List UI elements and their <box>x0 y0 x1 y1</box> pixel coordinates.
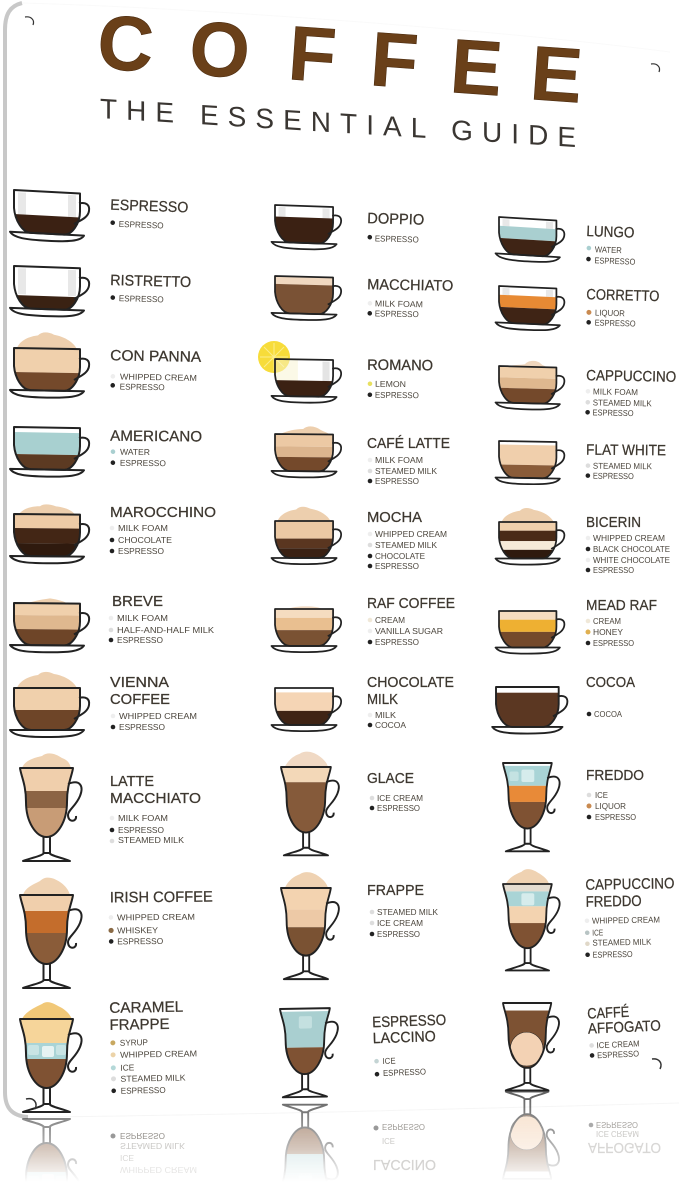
label: chocolate milk: MILK <box>367 691 398 708</box>
label: cappuccino: MILK FOAM <box>593 386 638 397</box>
label: freddo: ESPRESSO <box>595 812 636 822</box>
drink: doppio <box>271 205 424 250</box>
title: COFFEE: COFFEE <box>95 0 585 120</box>
label: lungo: LUNGO <box>586 223 635 242</box>
icon: cappuccino freddo glass <box>503 869 560 970</box>
label: mocha: ESPRESSO <box>375 561 419 571</box>
label: cappuccino: STEAMED MILK <box>593 397 652 408</box>
label: doppio <box>367 210 424 245</box>
label: raf coffee: VANILLA SUGAR <box>375 626 443 636</box>
icon: vienna coffee cup <box>10 672 89 737</box>
label: cappuccino freddo: WHIPPED CREAM <box>592 914 660 926</box>
label: mead raf <box>586 597 657 648</box>
label: mead raf: ESPRESSO <box>593 638 634 648</box>
drink: cappuccino <box>496 360 676 419</box>
drink: americano <box>10 427 202 477</box>
label: mocha: WHIPPED CREAM <box>375 529 447 539</box>
label: americano: ESPRESSO <box>120 458 166 468</box>
label: caramel frappe: WHIPPED CREAM <box>120 1048 197 1060</box>
label: mead raf: HONEY <box>593 627 623 637</box>
icon: caramel frappe glass <box>20 1002 82 1112</box>
label: flat white: STEAMED MILK <box>593 461 652 471</box>
drink: mocha <box>271 507 447 571</box>
label: romano: LEMON <box>375 379 406 389</box>
label: cocoa <box>586 674 635 719</box>
label: caramel frappe: SYRUP <box>120 1037 148 1048</box>
drink: flat white <box>496 441 666 485</box>
reflection: glasses <box>20 1092 559 1191</box>
icon: espresso cup <box>10 190 89 243</box>
label: glace: ESPRESSO <box>377 803 420 813</box>
icon: mocha cup <box>271 507 341 564</box>
label: caffe affogato: ICE CREAM <box>596 1038 640 1050</box>
icon: cafe latte cup <box>271 426 341 478</box>
icon: espresso laccino glass <box>280 1008 338 1097</box>
icon: lungo cup <box>496 217 564 264</box>
icon: marocchino cup <box>10 504 89 564</box>
drink: macchiato <box>271 276 453 321</box>
icon: chocolate milk cup <box>271 688 341 731</box>
icon: glace glass <box>281 752 339 855</box>
label: marocchino: CHOCOLATE <box>118 535 172 545</box>
drink: cafe latte <box>271 426 450 486</box>
label: breve: BREVE <box>112 593 163 610</box>
label: espresso laccino: ESPRESSO <box>372 1012 446 1031</box>
reflection: mirrored labels <box>110 1120 661 1175</box>
label: marocchino <box>110 504 216 556</box>
icon: con panna cup <box>10 332 89 398</box>
icon: irish coffee glass <box>20 878 82 988</box>
icon: latte macchiato glass <box>20 753 82 861</box>
label: espresso <box>110 197 189 231</box>
label: cafe latte: CAFÉ LATTE <box>367 435 450 452</box>
drink: caramel frappe <box>20 998 198 1112</box>
label: caramel frappe: ESPRESSO <box>121 1085 166 1096</box>
label: ristretto: ESPRESSO <box>119 293 164 304</box>
label: marocchino: MILK FOAM <box>118 523 168 533</box>
label: irish coffee: WHIPPED CREAM <box>117 912 195 922</box>
label: macchiato: MACCHIATO <box>367 276 453 295</box>
subtitle: The Essential Guide: THE ESSENTIAL GUIDE <box>100 93 576 153</box>
icon: doppio cup <box>271 205 341 250</box>
drink: cocoa <box>492 674 635 734</box>
label: espresso: ESPRESSO <box>118 219 164 230</box>
label: bicerin: WHITE CHOCOLATE <box>593 555 670 565</box>
label: cappuccino freddo: ESPRESSO <box>593 949 633 960</box>
label: caramel frappe: FRAPPE <box>109 1016 170 1034</box>
reflection: mirrored labels: LACCINO <box>373 1156 436 1173</box>
label: corretto: CORRETTO <box>586 286 660 305</box>
label: mocha: STEAMED MILK <box>375 540 437 550</box>
label: raf coffee <box>367 595 455 647</box>
label: espresso laccino: ICE <box>382 1056 396 1066</box>
drink: romano <box>258 341 433 403</box>
label: bicerin: BLACK CHOCOLATE <box>593 544 670 554</box>
reflection: mirrored labels: ICE CREAM <box>596 1129 639 1139</box>
reflection: mirrored labels: ICE <box>120 1153 134 1163</box>
icon: americano cup <box>10 427 89 477</box>
label: chocolate milk: CHOCOLATE <box>367 674 454 691</box>
label: con panna <box>110 347 201 393</box>
label: cappuccino <box>585 367 676 419</box>
drink: ristretto <box>10 266 191 318</box>
label: cappuccino freddo: FREDDO <box>586 893 642 911</box>
label: cocoa: COCOA <box>586 674 635 691</box>
label: freddo <box>586 767 644 822</box>
label: frappe: FRAPPE <box>367 882 424 899</box>
label: bicerin: ESPRESSO <box>593 565 634 575</box>
label: flat white <box>586 442 666 481</box>
icon: ristretto cup <box>10 266 89 318</box>
label: cafe latte <box>367 435 450 486</box>
label: breve: ESPRESSO <box>117 635 163 645</box>
reflection: mirrored labels: ESPRESSO <box>382 1122 425 1132</box>
drink: corretto <box>496 286 660 331</box>
label: mead raf: MEAD RAF <box>586 597 657 614</box>
label: vienna coffee: VIENNA <box>110 674 169 691</box>
label: flat white: ESPRESSO <box>593 471 634 481</box>
icon: flat white cup <box>496 441 564 485</box>
icon: frappe glass <box>281 872 339 979</box>
label: mead raf: CREAM <box>593 616 621 626</box>
label: lungo: ESPRESSO <box>594 255 636 267</box>
label: espresso laccino <box>372 1012 448 1078</box>
label: cocoa: COCOA <box>594 709 622 719</box>
label: latte macchiato <box>110 773 201 845</box>
label: corretto: ESPRESSO <box>595 317 636 329</box>
icon: corretto cup <box>496 286 564 331</box>
drink: bicerin <box>496 508 670 575</box>
label: caffe affogato <box>587 1002 662 1061</box>
label: caffe affogato: AFFOGATO <box>588 1017 661 1038</box>
label: espresso laccino: ESPRESSO <box>383 1066 426 1078</box>
label: marocchino: ESPRESSO <box>118 546 164 556</box>
icon: breve cup <box>10 598 89 653</box>
label: frappe: ICE CREAM <box>377 918 423 928</box>
label: cafe latte: STEAMED MILK <box>375 466 437 476</box>
label: americano: WATER <box>120 447 150 457</box>
label: cafe latte: ESPRESSO <box>375 476 419 486</box>
label: glace <box>367 770 423 813</box>
reflection: mirrored labels: ESPRESSO <box>596 1120 638 1130</box>
label: freddo: LIQUOR <box>595 801 626 811</box>
drink: latte macchiato <box>20 753 201 861</box>
label: romano <box>367 357 433 400</box>
label: glace: ICE CREAM <box>377 793 423 803</box>
label: freddo: ICE <box>595 790 608 800</box>
label: mocha: CHOCOLATE <box>375 551 425 561</box>
label: frappe: STEAMED MILK <box>377 907 438 917</box>
label: ristretto <box>110 272 191 305</box>
label: cappuccino: ESPRESSO <box>593 407 634 418</box>
label: latte macchiato: MILK FOAM <box>118 813 168 823</box>
label: vienna coffee: ESPRESSO <box>119 722 165 732</box>
icon: bicerin cup <box>496 508 564 565</box>
label: vienna coffee: WHIPPED CREAM <box>119 711 197 721</box>
icon: caffe affogato glass <box>503 1003 559 1090</box>
drink: freddo <box>503 763 644 851</box>
label: chocolate milk <box>367 674 454 730</box>
reflection: mirrored labels: ICE <box>382 1136 395 1146</box>
label: macchiato <box>367 276 453 320</box>
icon: cocoa cup <box>492 687 567 734</box>
reflection: mirrored labels: AFFOGATO <box>588 1139 661 1156</box>
label: breve <box>109 593 214 645</box>
label: corretto: LIQUOR <box>595 307 625 318</box>
reflection: mirrored labels: ESPRESSO <box>120 1131 165 1141</box>
label: irish coffee <box>108 889 213 946</box>
label: cappuccino freddo: ICE <box>592 927 604 938</box>
drink: glace <box>281 752 423 855</box>
label: glace: GLACE <box>367 770 414 787</box>
label: frappe: ESPRESSO <box>377 929 420 939</box>
icon: cappuccino cup <box>496 360 564 410</box>
label: latte macchiato: LATTE <box>110 773 154 790</box>
icon: mead raf cup <box>496 611 564 654</box>
drink: breve <box>10 593 214 653</box>
label: caramel frappe: ICE <box>120 1062 135 1073</box>
label: doppio: ESPRESSO <box>375 233 419 245</box>
label: romano: ESPRESSO <box>375 390 419 400</box>
label: marocchino: MAROCCHINO <box>110 504 216 521</box>
label: irish coffee: IRISH COFFEE <box>110 889 213 906</box>
label: latte macchiato: ESPRESSO <box>118 825 164 835</box>
drink: caffe affogato <box>503 1002 662 1090</box>
label: macchiato: MILK FOAM <box>375 298 423 309</box>
label: cafe latte: MILK FOAM <box>375 455 423 465</box>
label: con panna: CON PANNA <box>110 347 201 366</box>
drink: frappe <box>281 872 438 979</box>
label: freddo: FREDDO <box>586 767 644 784</box>
label: mocha <box>367 509 447 571</box>
icon: macchiato cup <box>271 276 341 321</box>
icon: romano cup <box>271 359 341 403</box>
label: raf coffee: RAF COFFEE <box>367 595 455 612</box>
label: vienna coffee: COFFEE <box>110 691 170 708</box>
label: vienna coffee <box>110 674 197 732</box>
drink: espresso laccino <box>280 1008 448 1097</box>
label: bicerin: WHIPPED CREAM <box>593 533 665 543</box>
drink: lungo <box>496 217 637 267</box>
reflection: mirrored labels: STEAMED MILK <box>120 1141 185 1151</box>
label: cappuccino freddo: STEAMED MILK <box>592 937 652 948</box>
label: ristretto: RISTRETTO <box>110 272 191 291</box>
drink: chocolate milk <box>271 674 454 731</box>
drink: mead raf <box>496 597 657 654</box>
label: caffe affogato: CAFFÉ <box>587 1004 630 1023</box>
icon: lemon slice <box>258 341 290 373</box>
drink: con panna <box>10 332 201 398</box>
label: americano <box>110 428 202 468</box>
label: flat white: FLAT WHITE <box>586 442 666 459</box>
icon: raf coffee cup <box>271 606 341 652</box>
label: corretto <box>586 286 660 329</box>
label: mocha: MOCHA <box>367 509 422 526</box>
label: espresso laccino: LACCINO <box>372 1028 436 1047</box>
label: breve: HALF-AND-HALF MILK <box>117 625 214 635</box>
label: latte macchiato: MACCHIATO <box>110 790 201 807</box>
label: lungo: WATER <box>595 244 622 255</box>
label: americano: AMERICANO <box>110 428 202 445</box>
label: con panna: WHIPPED CREAM <box>120 371 197 383</box>
label: raf coffee: CREAM <box>375 615 405 625</box>
label: bicerin: BICERIN <box>586 514 641 531</box>
drink: irish coffee <box>20 878 213 988</box>
label: espresso: ESPRESSO <box>110 197 189 216</box>
drink: cappuccino freddo <box>503 869 676 970</box>
label: frappe <box>367 882 438 939</box>
label: breve: MILK FOAM <box>117 613 168 623</box>
drink: raf coffee <box>271 595 455 652</box>
label: caramel frappe: STEAMED MILK <box>120 1073 186 1084</box>
label: romano: ROMANO <box>367 357 433 374</box>
label: macchiato: ESPRESSO <box>375 308 419 319</box>
label: latte macchiato: STEAMED MILK <box>118 835 184 845</box>
label: bicerin <box>586 514 670 575</box>
icon: freddo glass <box>503 763 560 851</box>
label: lungo <box>585 223 637 267</box>
label: chocolate milk: COCOA <box>375 720 406 730</box>
label: con panna: ESPRESSO <box>120 381 165 392</box>
label: irish coffee: WHISKEY <box>117 925 158 935</box>
label: raf coffee: ESPRESSO <box>375 637 419 647</box>
label: caramel frappe <box>109 998 198 1096</box>
reflection: mirrored labels: WHIPPED CREAM <box>120 1165 197 1175</box>
label: irish coffee: ESPRESSO <box>117 936 164 946</box>
drink: marocchino <box>10 504 216 564</box>
drink: vienna coffee <box>10 672 197 737</box>
drink: espresso <box>10 190 189 243</box>
label: caramel frappe: CARAMEL <box>109 999 183 1017</box>
label: cappuccino freddo <box>584 875 676 960</box>
label: chocolate milk: MILK <box>375 710 396 720</box>
label: doppio: DOPPIO <box>367 210 424 229</box>
label: caffe affogato: ESPRESSO <box>597 1048 640 1060</box>
